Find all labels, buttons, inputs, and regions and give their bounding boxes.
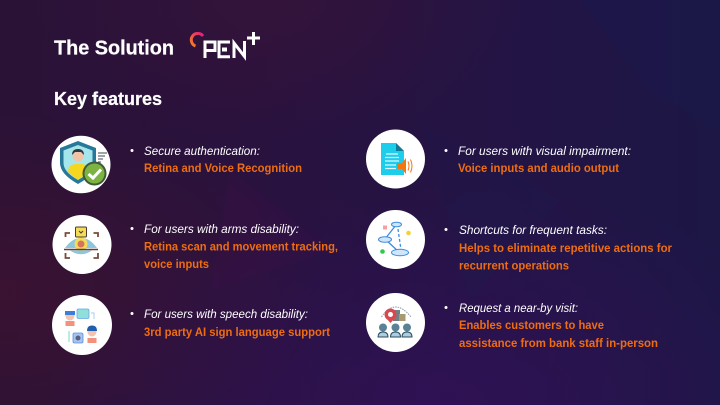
bullet (444, 228, 448, 231)
text: near-by visit label: Request a near-by visit: (459, 301, 578, 315)
text: arms disability detail line 2: voice inputs (144, 259, 209, 271)
text: speech disability detail: 3rd party AI sign language support (144, 327, 330, 339)
text: arms disability label: For users with arms disability: (144, 222, 299, 236)
text: visual impairment detail: Voice inputs and audio output (458, 163, 619, 175)
icon: shield with check (52, 136, 110, 193)
text: speech disability label: For users with speech disability: (144, 307, 308, 321)
text: arms disability detail line 1: Retina scan and movement tracking, (144, 242, 338, 254)
heading: key features: Key features (54, 89, 162, 109)
bullet (444, 306, 448, 309)
title: The Solution (54, 38, 174, 60)
feature: secure authentication (52, 136, 302, 193)
icon: workflow shortcuts (366, 210, 425, 269)
feature: near-by visit (366, 293, 658, 352)
text: shortcuts label: Shortcuts for frequent tasks: (459, 223, 607, 237)
bullet (130, 227, 134, 230)
icon: document with speaker (366, 130, 425, 188)
text: shortcuts detail line 2: recurrent operations (459, 260, 569, 272)
icon: sign language conversation (52, 295, 112, 355)
feature: speech disability (52, 295, 330, 355)
icon: retina scan (52, 215, 112, 274)
bullet (130, 312, 134, 315)
logo: OPEN+ (191, 32, 260, 58)
icon: bank staff and location pin (366, 293, 425, 352)
feature: visual impairment (366, 130, 631, 188)
text: secure authentication label: Secure authentication: (144, 144, 260, 158)
bullet (130, 149, 134, 152)
text: visual impairment label: For users with visual impairment: (458, 144, 631, 158)
text: secure authentication detail: Retina and Voice Recognition (144, 163, 302, 175)
text: near-by visit detail line 2: assistance from bank staff in-person (459, 338, 658, 350)
text: near-by visit detail line 1: Enables customers to have (459, 320, 604, 332)
text: shortcuts detail line 1: Helps to eliminate repetitive actions for (459, 243, 673, 255)
feature: shortcuts (366, 210, 673, 272)
bullet (444, 149, 448, 152)
feature: arms disability (52, 215, 338, 274)
